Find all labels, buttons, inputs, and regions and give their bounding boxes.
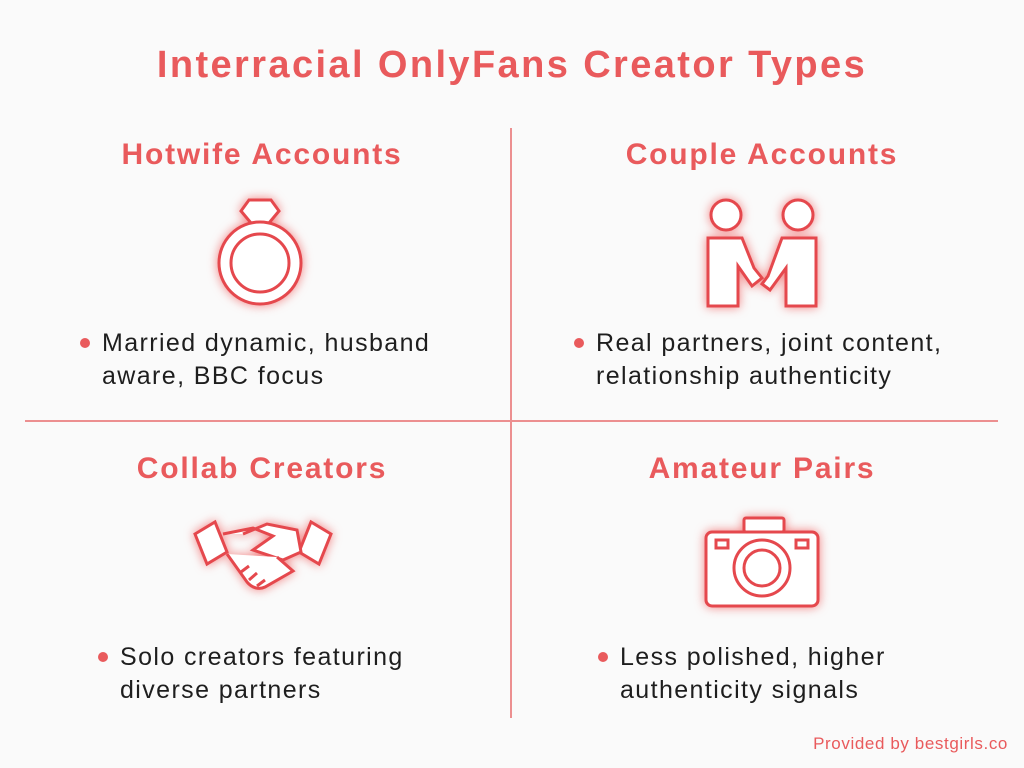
- bullet: collab: Solo creators featuring: [120, 643, 404, 671]
- bullet: collab: [120, 641, 404, 707]
- panel: couple: [574, 138, 942, 390]
- bullet: hotwife: Married dynamic, husband: [102, 329, 430, 357]
- bullet: collab: diverse partners: [120, 676, 322, 704]
- heading: collab: Collab Creators: [137, 452, 387, 485]
- bullet: couple: [596, 327, 942, 393]
- bullet: hotwife: aware, BBC focus: [102, 362, 324, 390]
- icon: ring: [210, 192, 310, 312]
- bullet: couple: Real partners, joint content,: [596, 329, 942, 357]
- footer credit: Provided by bestgirls.co: [813, 734, 1008, 753]
- divider horizontal: [25, 420, 998, 422]
- bullet: hotwife: [102, 327, 430, 393]
- bullet: amateur: Less polished, higher: [620, 643, 886, 671]
- divider vertical: [510, 128, 512, 718]
- bullet: amateur: [620, 641, 886, 707]
- heading: couple: Couple Accounts: [626, 138, 898, 171]
- panel: amateur: [598, 452, 886, 704]
- heading: hotwife: Hotwife Accounts: [121, 138, 403, 171]
- bullet: couple: relationship authenticity: [596, 362, 892, 390]
- panel: hotwife: [80, 138, 430, 390]
- icon: couple: [700, 192, 824, 314]
- title: Interracial OnlyFans Creator Types: [157, 44, 867, 86]
- panel: collab: [98, 452, 404, 704]
- bullet: amateur: authenticity signals: [620, 676, 859, 704]
- icon: camera: [698, 510, 826, 614]
- icon: handshake: [188, 516, 338, 596]
- heading: amateur: Amateur Pairs: [649, 452, 875, 485]
